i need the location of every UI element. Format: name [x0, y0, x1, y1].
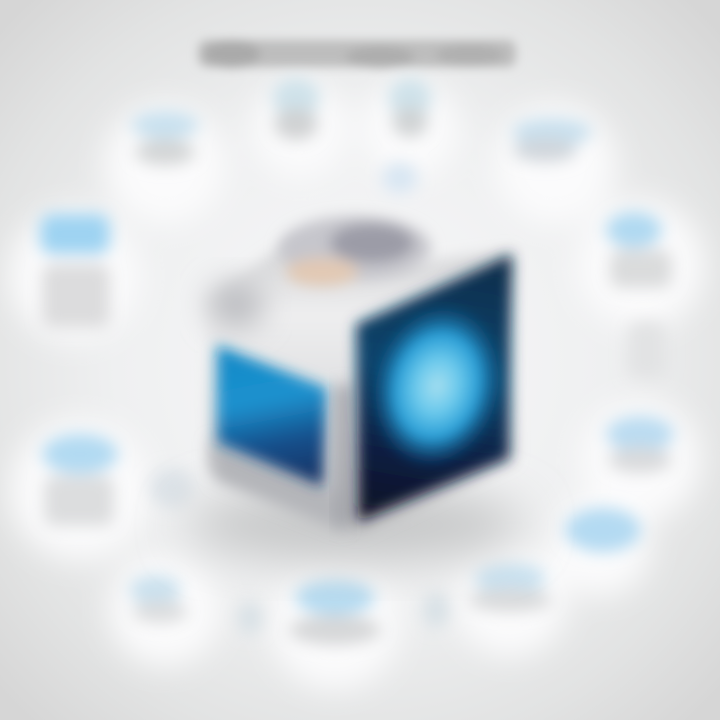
node: top centre left — [272, 78, 320, 140]
node: bottom centre right — [423, 563, 552, 628]
node: top left — [131, 111, 199, 165]
cube drop shadow — [185, 487, 525, 563]
cube body — [206, 240, 514, 534]
node: lower right — [606, 416, 674, 473]
cube illustration — [206, 216, 521, 534]
node: bottom centre — [289, 579, 381, 645]
node: bottom left — [129, 575, 262, 634]
right dark screen — [356, 254, 512, 522]
node: top centre right — [382, 78, 432, 193]
node: upper left — [40, 214, 110, 328]
cube lower left shading — [210, 440, 345, 530]
node: top right — [512, 118, 592, 162]
left blue screen — [217, 345, 327, 487]
node: upper right — [606, 212, 672, 378]
cube top edge shading — [208, 281, 264, 329]
node: lower left — [42, 434, 194, 526]
right screen glow — [353, 289, 521, 483]
node: bottom right — [565, 508, 641, 552]
top panel — [279, 216, 431, 286]
title — [198, 40, 516, 68]
inner edge shadow — [336, 385, 350, 525]
